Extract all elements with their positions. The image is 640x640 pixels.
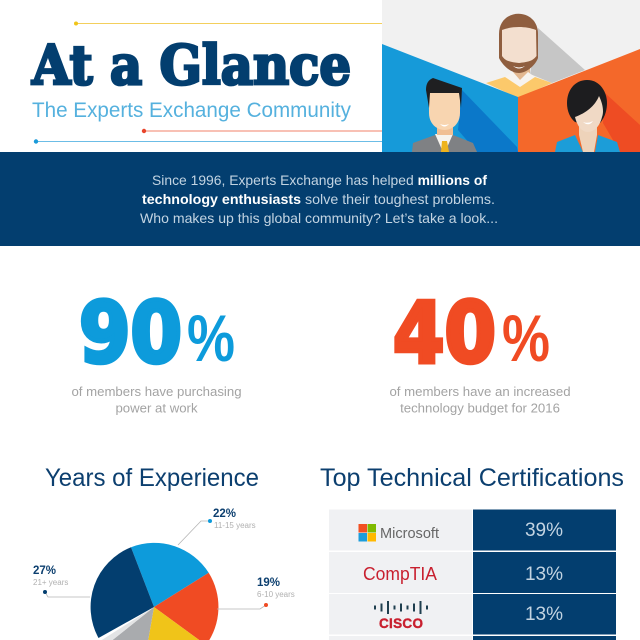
label: 22%: 22% xyxy=(213,508,236,520)
row: CompTIA: 13% xyxy=(525,564,563,585)
title: At a Glance xyxy=(31,33,351,97)
stat caption: technology budget for 2016 xyxy=(400,400,560,416)
stat caption: of members have an increased xyxy=(389,384,571,399)
row: Microsoft xyxy=(329,510,616,550)
label: 27%: 27% xyxy=(33,565,56,577)
stat: 90%: 90 xyxy=(79,284,182,382)
label: 19%: 19% xyxy=(257,577,280,589)
shadow behind bearded man xyxy=(530,28,585,83)
intro band: Who makes up this global community? Let’s take a look... xyxy=(140,210,498,226)
stat caption: of members have purchasing xyxy=(71,384,242,399)
illustration: community members xyxy=(382,0,640,152)
label: 19%: 6-10 years xyxy=(257,590,295,599)
stat: 40% xyxy=(389,284,571,416)
icon: bearded man xyxy=(486,14,552,98)
orange panel xyxy=(518,49,640,152)
icon: woman with dark hair xyxy=(555,80,620,152)
subtitle: The Experts Exchange Community xyxy=(32,99,351,122)
logo: Cisco: CISCO xyxy=(379,616,423,631)
label: 27%: 21+ years xyxy=(33,578,68,587)
table: certifications xyxy=(329,510,616,640)
stat caption: power at work xyxy=(115,400,198,416)
label: 22%: 11-15 years xyxy=(214,521,256,530)
stat: 90% xyxy=(71,284,242,416)
icon: man in suit xyxy=(412,78,477,152)
label: 27% xyxy=(33,565,90,597)
blue panel xyxy=(382,44,518,152)
row: Cisco xyxy=(329,594,616,634)
stat: 90%: % xyxy=(187,301,235,375)
label: 19% xyxy=(217,577,295,609)
row: partially visible fourth row xyxy=(329,636,616,640)
heading: top technical certifications: Top Technical Certifications xyxy=(320,464,624,492)
heading: years of experience: Years of Experience xyxy=(45,464,259,492)
logo: Microsoft: Microsoft xyxy=(380,525,440,542)
stat: 40%: % xyxy=(502,301,550,375)
logo: CompTIA: CompTIA xyxy=(363,564,437,584)
header decorative connector lines xyxy=(34,22,382,144)
label: 22% xyxy=(178,508,256,545)
stat: 40%: 40 xyxy=(393,284,496,382)
row: Microsoft: 39% xyxy=(525,520,563,541)
row: CompTIA xyxy=(329,552,616,593)
logo: Cisco xyxy=(375,601,427,631)
intro band xyxy=(0,152,640,246)
intro text: Since 1996, Experts Exchange has helped millions of xyxy=(152,172,487,188)
pie chart: years of experience xyxy=(33,508,295,640)
row: Cisco: 13% xyxy=(525,604,563,625)
logo: Microsoft xyxy=(358,524,440,542)
intro band: technology enthusiasts solve their toughest problems. xyxy=(142,191,495,207)
